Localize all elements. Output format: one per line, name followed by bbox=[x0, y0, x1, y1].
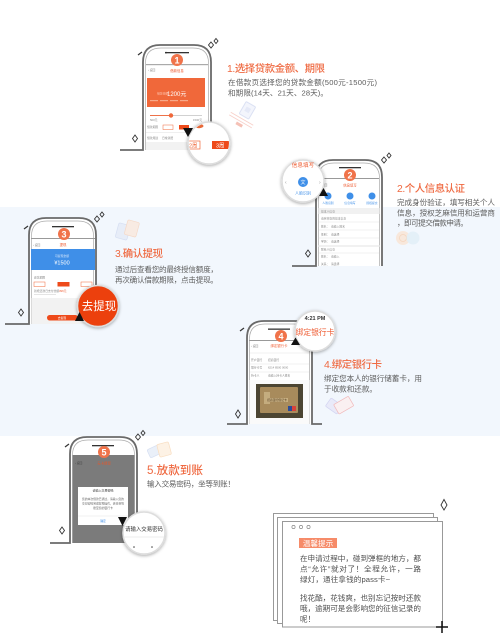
step 2 phone: ‹ 返回 bbox=[320, 183, 328, 187]
sparkles step 1 bbox=[132, 38, 218, 142]
step 2 magnifier: 文 bbox=[300, 179, 306, 186]
step 2 number badge bbox=[344, 169, 356, 181]
confirm button: 去提现 bbox=[58, 316, 66, 320]
step 1 phone: 借款信息 bbox=[170, 68, 184, 73]
plus mark bbox=[436, 621, 448, 633]
tips text: 绿灯，通往拿钱的pass卡~ bbox=[300, 574, 391, 584]
withdrawal amount card: 可提现金额 bbox=[55, 254, 69, 258]
step 2 phone: 性别： bbox=[321, 232, 329, 236]
tips text: 在申请过程中，碰到弹框的地方，都 bbox=[300, 553, 421, 563]
icon: pale cards 3 bbox=[115, 220, 140, 240]
step 2 text: 2.个人信息认证 bbox=[397, 182, 466, 195]
tips card stack bbox=[274, 514, 448, 633]
step 1 magnifier: 3周 bbox=[216, 142, 225, 150]
step 4 number badge bbox=[275, 330, 287, 342]
tips text: 呢！ bbox=[300, 614, 315, 624]
progress steps: 信息填写 bbox=[344, 201, 356, 205]
step 2 phone: 联系人信息 bbox=[321, 248, 335, 252]
step 1 phone: ‹ 返回 bbox=[148, 68, 156, 72]
step 1 text bbox=[227, 62, 377, 98]
tips text bbox=[300, 553, 421, 624]
step 1 phone: 借款期限 bbox=[147, 125, 158, 129]
step 3 phone: 396元 bbox=[59, 289, 67, 293]
step 1 number badge bbox=[171, 54, 183, 66]
step 5 phone: ‹ 返回 bbox=[75, 461, 83, 465]
pale blue background band bbox=[0, 207, 500, 436]
tips text: 点“允许”就对了！全程允许，一路 bbox=[300, 564, 421, 574]
step 5 number badge: 5 bbox=[101, 448, 107, 458]
step 2 phone: 请完善您的基本信息 bbox=[321, 216, 346, 220]
amount slider bbox=[150, 113, 202, 122]
progress steps: 人脸识别 bbox=[322, 201, 334, 205]
step 5 text: 输入交易密码，坐等到账！ bbox=[147, 478, 235, 488]
step 1 text: 1.选择贷款金额、期限 bbox=[227, 62, 326, 75]
sparkles step 5 bbox=[60, 430, 145, 534]
password dialog bbox=[78, 487, 128, 525]
loan amount card bbox=[147, 78, 205, 107]
withdrawal amount card bbox=[31, 249, 95, 270]
step 5 phone bbox=[50, 437, 137, 543]
step 3 number badge: 3 bbox=[61, 230, 67, 240]
step 2 phone: 信息填写 bbox=[343, 182, 357, 188]
step 5 text: 5.放款到账 bbox=[147, 463, 203, 477]
step 4 phone: 6214 8500 0000 bbox=[268, 366, 289, 370]
step 5 text bbox=[147, 463, 235, 488]
step 2 text: ，即可提交借款申请。 bbox=[397, 218, 468, 228]
step 2 phone: 请选择 bbox=[331, 240, 340, 244]
bank card photo: 招商银行借记卡 bbox=[267, 398, 287, 402]
tips badge: 温馨提示 bbox=[303, 538, 334, 548]
step 2 phone: 关系： bbox=[321, 262, 329, 266]
step 4 phone: 绑定银行卡 bbox=[271, 343, 288, 348]
loan amount card: 1200元 bbox=[167, 91, 186, 98]
step 3 text: 通过后查看您的最终授信额度， bbox=[115, 264, 218, 274]
step 2 phone: 请选择 bbox=[331, 232, 340, 236]
tips text: 哦，逾期可是会影响您的征信记录的 bbox=[300, 603, 421, 613]
step 1 magnifier bbox=[183, 122, 230, 164]
amount slider: 1500元 bbox=[193, 118, 202, 122]
step 1 number badge: 1 bbox=[174, 56, 180, 66]
step 2 number badge: 2 bbox=[347, 170, 353, 180]
step 1 phone: 借款用途 bbox=[147, 136, 158, 140]
step 3 phone: 还款期限 bbox=[34, 276, 45, 280]
step 5 number badge bbox=[98, 446, 110, 458]
sparkle above tips bbox=[441, 500, 447, 510]
step 4 phone: 持卡人 bbox=[251, 374, 260, 378]
step 5 magnifier bbox=[118, 512, 165, 554]
step 3 phone: ‹ 返回 bbox=[33, 243, 41, 247]
step 4 magnifier: 4:21 PM bbox=[305, 316, 326, 322]
step 3 phone: 提现 bbox=[60, 242, 67, 247]
step 2 phone bbox=[292, 160, 382, 266]
step 1 phone bbox=[120, 45, 211, 150]
window dots bbox=[292, 525, 310, 529]
step 4 phone: 招商银行 bbox=[268, 358, 279, 362]
amount slider: 500元 bbox=[150, 118, 158, 122]
step 1 magnifier: 2周 bbox=[189, 142, 198, 150]
step 4 phone: 请输入持卡人姓名 bbox=[268, 374, 291, 378]
step 2 magnifier: › bbox=[319, 180, 321, 186]
sparkles step 4 bbox=[236, 328, 244, 418]
step 3 text: 3.确认提现 bbox=[115, 247, 163, 260]
step 4 magnifier bbox=[291, 311, 335, 351]
step 3 magnifier: 去提现 bbox=[82, 299, 116, 313]
step 2 magnifier: 人脸识别 bbox=[295, 190, 311, 196]
step 4 phone: 银行卡号 bbox=[251, 366, 262, 370]
step 3 magnifier bbox=[75, 286, 118, 326]
step 4 text: 4.绑定银行卡 bbox=[324, 358, 382, 371]
step 2 phone: 请输入姓名 bbox=[331, 224, 345, 228]
step 2 phone: 学历： bbox=[321, 240, 329, 244]
icon: pale bank cards 4 bbox=[325, 396, 354, 414]
password dialog: 账至您的银行卡 bbox=[93, 506, 113, 510]
password dialog: 交易密码完成提现操作，资金将到 bbox=[82, 502, 124, 506]
step 3 phone bbox=[5, 218, 96, 324]
step 3 phone: 新增还款日支付金额 bbox=[34, 289, 59, 293]
password dialog: 请输入交易密码 bbox=[92, 488, 114, 492]
step 4 text bbox=[324, 358, 422, 394]
step 2 text: 完成身份验证，填写相关个人 bbox=[397, 197, 495, 207]
step 1 text: 在借款页选择您的贷款金额(500元-1500元) bbox=[228, 77, 377, 87]
step 4 number badge: 4 bbox=[278, 332, 284, 342]
icon: pale circles 2 bbox=[396, 231, 420, 245]
step 2 magnifier bbox=[282, 160, 328, 202]
step 2 magnifier: 信息填写 bbox=[292, 161, 315, 169]
sparkles step 3 bbox=[18, 212, 104, 316]
icon: pale wallet 5 bbox=[147, 442, 172, 458]
step 2 text bbox=[397, 182, 495, 228]
step 2 text: 信息，授权芝麻信用和运营商 bbox=[397, 208, 495, 218]
step 2 phone: 基本人信息 bbox=[321, 210, 335, 214]
withdrawal amount card: ¥1500 bbox=[54, 260, 70, 266]
step 4 text: 绑定您本人的银行储蓄卡，用 bbox=[324, 373, 422, 383]
sparkles step 2 bbox=[306, 153, 391, 257]
password dialog: 您的本次借款已通过，请输入您的 bbox=[82, 497, 124, 501]
step 4 magnifier: 绑定银行卡 bbox=[296, 327, 335, 337]
step 3 text bbox=[115, 247, 218, 284]
step 1 text: 和期限(14天、21天、28天)。 bbox=[228, 88, 328, 98]
step 2 phone: 请选择 bbox=[331, 262, 340, 266]
step 5 phone: 无卡提现 bbox=[97, 460, 111, 466]
step 2 phone: 姓名： bbox=[321, 224, 329, 228]
progress steps: 授权提交 bbox=[366, 201, 378, 205]
step 2 phone: 请输入 bbox=[331, 254, 340, 258]
step 5 magnifier: 请输入交易密码 bbox=[125, 525, 163, 533]
step 3 number badge bbox=[58, 228, 70, 240]
step 3 text: 再次确认借款期限，点击提现。 bbox=[115, 274, 218, 284]
step 2 magnifier: ‹ bbox=[285, 180, 287, 186]
password dialog: 确定 bbox=[100, 519, 106, 523]
step 2 phone: 姓名： bbox=[321, 254, 329, 258]
step 4 phone bbox=[227, 321, 322, 424]
step 4 phone: ‹ 返回 bbox=[251, 344, 259, 348]
progress steps bbox=[322, 192, 378, 205]
tips text: 找花酷，花钱爽，也别忘记按时还款 bbox=[300, 592, 421, 602]
step 4 text: 于收款和还款。 bbox=[324, 384, 377, 394]
step 1 phone: 日常消费 bbox=[162, 136, 173, 140]
step 4 phone: 开户银行 bbox=[251, 358, 262, 362]
icon: pale document 1 bbox=[227, 98, 262, 132]
loan amount card: 借款金额 bbox=[157, 92, 168, 96]
